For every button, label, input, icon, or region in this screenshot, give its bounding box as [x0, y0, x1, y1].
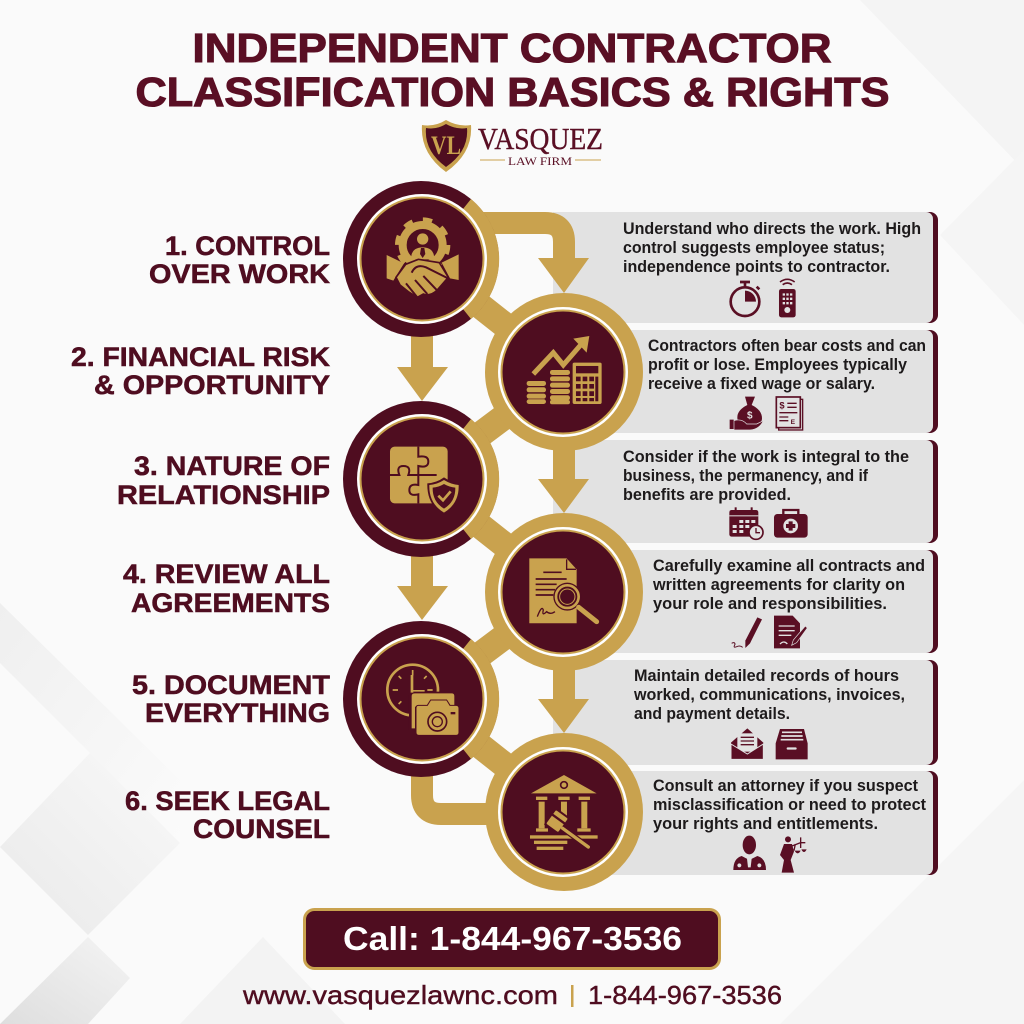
panel: control details background	[553, 212, 938, 323]
icon: growth coins and calculator	[527, 336, 602, 404]
icon: clock and camera	[387, 665, 459, 735]
arrow: step 3 down	[397, 586, 448, 620]
label: step 4: 4. REVIEW ALL	[123, 559, 330, 589]
icon: lady justice	[780, 836, 807, 873]
icon: file box	[776, 729, 808, 759]
text: control: independence points to contractor.	[623, 258, 890, 276]
icon: VL shield	[422, 120, 471, 172]
text: documentation	[633, 667, 905, 723]
circle: step 4	[485, 513, 643, 671]
label: step 5: 5. DOCUMENT	[132, 670, 331, 700]
circle: step 3	[343, 401, 499, 557]
icon: stopwatch	[731, 282, 759, 316]
title: INDEPENDENT CONTRACTOR	[192, 25, 832, 71]
panel: document details background	[553, 660, 938, 765]
icon: money bag in hand	[729, 397, 763, 430]
arrow: control to financial	[538, 258, 589, 293]
text: financial: receive a fixed wage or salary.	[648, 375, 875, 393]
label: step 2: & OPPORTUNITY	[94, 370, 330, 400]
text: agreements	[652, 557, 925, 613]
arrow: step 2 down	[538, 479, 589, 513]
label: step 6	[125, 786, 330, 844]
icon: calendar with clock	[729, 507, 763, 539]
arrow: step 1 down	[397, 367, 448, 401]
text: relationship	[623, 448, 909, 504]
icon: medical kit	[774, 510, 808, 538]
panel: agreements details background	[553, 550, 938, 653]
label: step 3: RELATIONSHIP	[117, 480, 330, 510]
panel: financial details background	[553, 330, 938, 433]
icon: open envelope	[731, 728, 763, 759]
label: step 1	[149, 231, 331, 289]
label: step 2: 2. FINANCIAL RISK	[71, 342, 331, 372]
text: agreements: Carefully examine all contracts and	[653, 557, 925, 575]
arrow: step 4 down	[538, 699, 589, 733]
icon: remote control	[779, 279, 796, 317]
icon: courthouse and gavel	[530, 775, 598, 850]
title	[136, 25, 889, 115]
text: relationship: business, the permanency, and if	[623, 467, 869, 485]
logo: Vasquez Law Firm	[422, 120, 603, 172]
icon: VL shield: VL	[431, 131, 461, 160]
footer contact: www.vasquezlawnc.com	[242, 980, 558, 1010]
label: step 5: EVERYTHING	[145, 698, 330, 728]
label: step 3: 3. NATURE OF	[134, 451, 330, 481]
icon: signed document	[774, 616, 807, 648]
title: CLASSIFICATION BASICS & RIGHTS	[136, 69, 889, 115]
text: legal counsel	[653, 777, 927, 833]
label: step 1: OVER WORK	[149, 259, 331, 289]
icon: statement document: $	[779, 401, 785, 411]
icon: gear and handshake	[387, 220, 459, 297]
circle: step 1	[343, 181, 499, 337]
label: step 2	[71, 342, 331, 400]
text: financial	[648, 337, 926, 393]
text: documentation: and payment details.	[634, 705, 790, 723]
label: step 3	[117, 451, 330, 510]
circle: step 2	[485, 293, 643, 451]
text: legal counsel: misclassification or need to protect	[653, 796, 927, 814]
icon: attorney	[733, 836, 766, 870]
circle: step 5	[343, 621, 499, 777]
text: control	[623, 220, 921, 276]
icon: pen signature	[732, 617, 762, 648]
text: financial: profit or lose. Employees typically	[648, 356, 908, 374]
text: agreements: your role and responsibilities.	[653, 595, 887, 613]
text: financial: Contractors often bear costs and can	[648, 337, 926, 355]
circle: step 6	[485, 733, 643, 891]
text: control: control suggests employee status;	[623, 239, 885, 257]
icon: money bag in hand: $	[747, 410, 753, 421]
text: relationship: Consider if the work is integral to the	[623, 448, 909, 466]
icon: statement document	[776, 397, 803, 430]
label: step 6: 6. SEEK LEGAL	[125, 786, 330, 816]
text: legal counsel: your rights and entitlements.	[653, 815, 878, 833]
footer contact: 1-844-967-3536	[588, 980, 782, 1010]
panel: legal counsel details background	[553, 771, 938, 875]
call button	[304, 910, 720, 968]
label: step 1: 1. CONTROL	[165, 231, 330, 261]
connectors between circles	[421, 223, 564, 814]
label: step 6: COUNSEL	[193, 814, 330, 844]
label: step 4: AGREEMENTS	[131, 588, 330, 618]
icon: puzzle and shield	[390, 447, 461, 515]
text: documentation: Maintain detailed records of hours	[634, 667, 899, 685]
footer contact	[242, 980, 782, 1010]
text: agreements: written agreements for clarity on	[652, 576, 905, 594]
call button: Call: 1-844-967-3536	[343, 920, 682, 957]
label: step 4	[123, 559, 330, 618]
text: legal counsel: Consult an attorney if you suspect	[653, 777, 919, 795]
logo: Vasquez Law Firm: LAW FIRM	[508, 154, 572, 168]
icon: statement document: E	[791, 419, 796, 426]
icon: contract and magnifier	[529, 558, 597, 623]
logo: Vasquez Law Firm: VASQUEZ	[478, 121, 603, 156]
panel: relationship details background	[553, 440, 938, 543]
text: control: Understand who directs the work. High	[623, 220, 921, 238]
label: step 5	[132, 670, 331, 728]
text: documentation: worked, communications, invoices,	[633, 686, 905, 704]
text: relationship: benefits are provided.	[623, 486, 791, 504]
